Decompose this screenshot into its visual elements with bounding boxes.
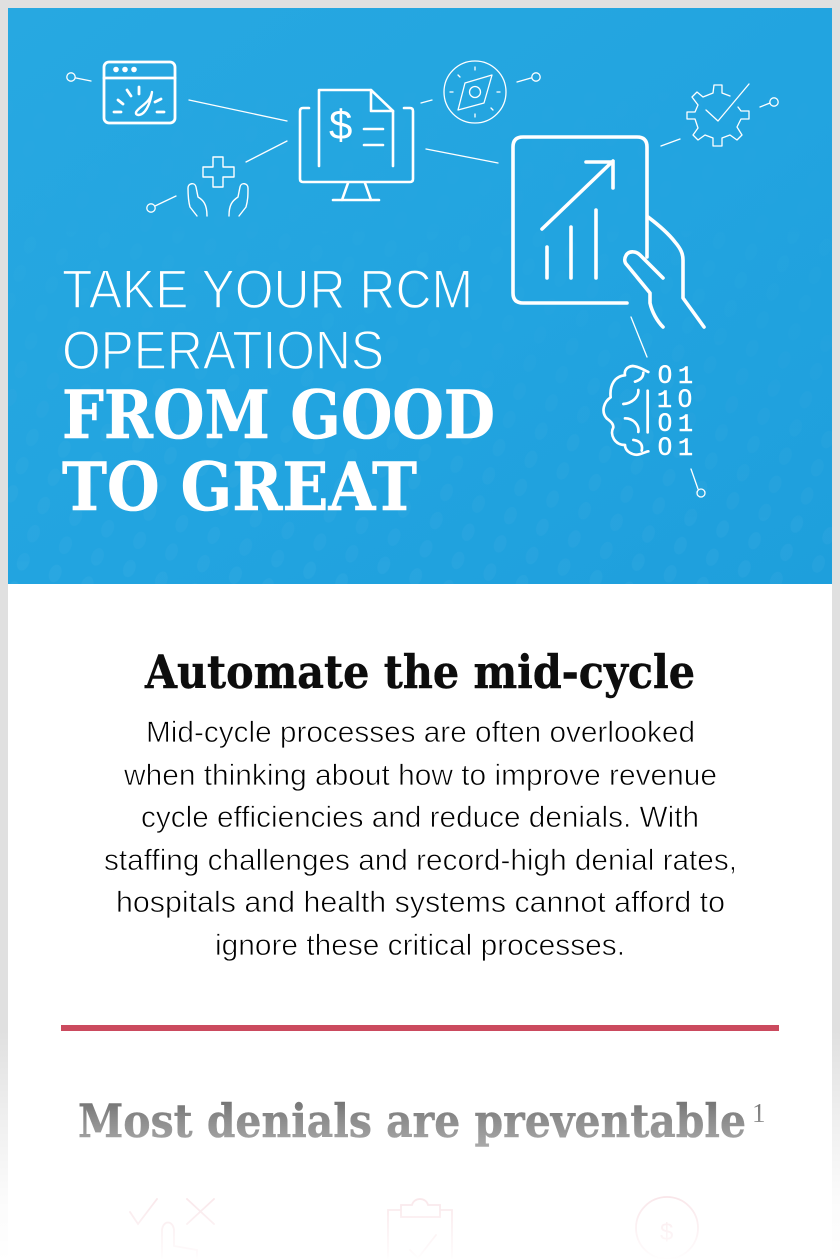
icon: connector lines and nodes, left: [67, 73, 287, 212]
icon: compass: [444, 61, 506, 123]
icon: browser speed gauge: [104, 62, 175, 123]
icon: brain with binary: 1: [678, 362, 693, 391]
heading: automate the mid-cycle: Automate the mid-cycle: [144, 645, 695, 699]
text block: intro paragraph: when thinking about how to improve revenue: [123, 759, 717, 792]
panel: hero banner: [8, 8, 832, 584]
title: OPERATIONS: [62, 319, 384, 381]
icon: brain with binary: 1: [657, 386, 672, 415]
heading: most denials are preventable: 1: [752, 1098, 766, 1128]
icon: coin with dollar: [636, 1197, 698, 1259]
text block: intro paragraph: hospitals and health systems cannot afford to: [116, 886, 725, 919]
icon: monitor with invoice: $: [329, 101, 352, 148]
icon: brain with binary: 0: [658, 361, 672, 389]
divider bar: [61, 1025, 779, 1031]
icon: brain with binary: 1: [678, 410, 693, 439]
icon: medical cross with hands: [188, 157, 248, 216]
text block: intro paragraph: cycle efficiencies and reduce denials. With: [141, 801, 699, 834]
icon: monitor with invoice: [300, 90, 413, 200]
icon: brain with binary: 0: [658, 409, 672, 437]
icon: check, cross and hand: [130, 1199, 214, 1260]
icon: connector to brain: [631, 317, 705, 497]
icon: clipboard with check: [388, 1199, 452, 1260]
text block: intro paragraph: Mid-cycle processes are often overlooked: [146, 716, 695, 749]
icon: coin with dollar: $: [660, 1219, 673, 1246]
icon: gear with check mark: [687, 84, 749, 146]
heading: most denials are preventable: Most denials are preventable: [78, 1094, 746, 1148]
title: TO GREAT: [62, 448, 417, 526]
title: TAKE YOUR RCM: [62, 258, 473, 320]
bottom fade overlay: [0, 1030, 840, 1260]
icon: brain with binary: 0: [678, 385, 692, 413]
title: [62, 258, 495, 526]
icon: compass connectors: [421, 73, 540, 163]
text block: intro paragraph: [104, 716, 737, 962]
title: FROM GOOD: [62, 376, 495, 454]
icon: tablet chart held in hand: [513, 137, 704, 327]
text block: intro paragraph: ignore these critical processes.: [215, 929, 625, 962]
panel: white content: [8, 584, 832, 1260]
text block: intro paragraph: staffing challenges and record-high denial rates,: [104, 844, 737, 877]
icon: brain with binary: [604, 361, 693, 463]
icon: gear connectors: [661, 98, 778, 146]
icon: brain with binary: 0: [658, 433, 672, 461]
icon: brain with binary: 1: [678, 434, 693, 463]
